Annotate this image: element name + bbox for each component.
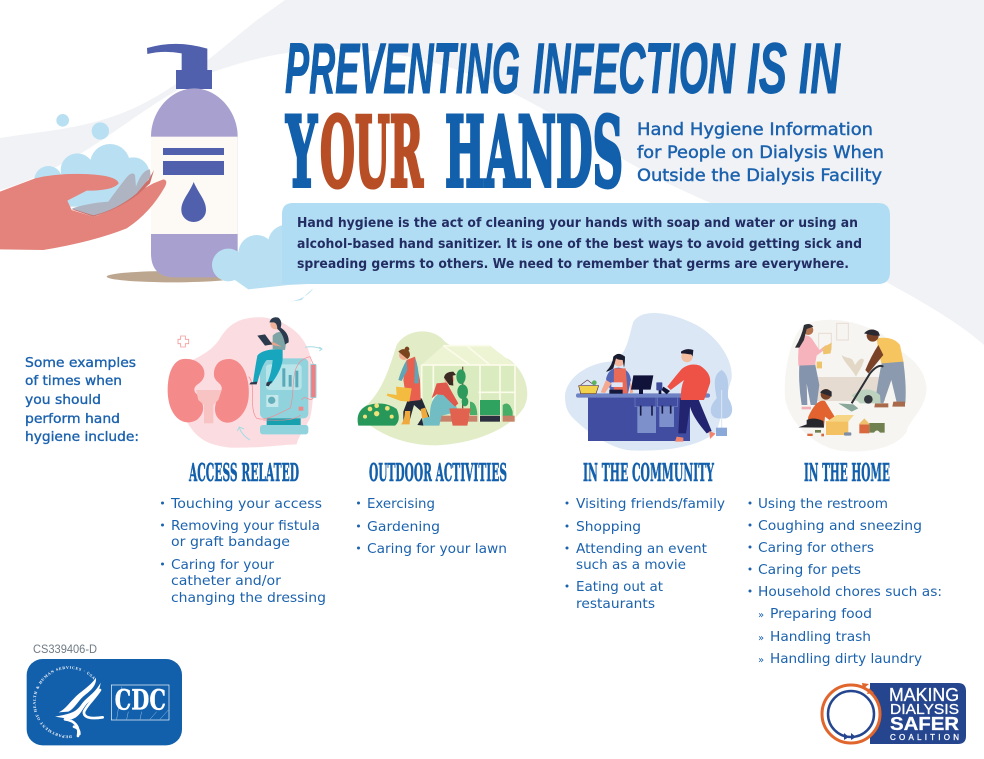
callout [282,203,890,284]
greenhouse [422,346,515,422]
foam on hand [34,114,149,207]
subtitle: Hand Hygiene Information [637,120,873,140]
illustration: in the home [785,320,927,452]
HHS eagle [55,678,103,736]
woman pouring [795,324,832,409]
title line one: IS [747,30,787,109]
CDC box: CDC [115,684,166,717]
list: in the home: » [758,655,764,666]
list: in the home: » [758,633,764,644]
document code: CS339406-D [33,642,97,656]
child with box [798,389,854,435]
list: in the home: Using the restroom [758,496,888,512]
side intro text: you should [25,393,101,408]
logo: Making Dialysis Safer Coalition: MAKING [889,685,959,705]
title line two: Y [286,96,318,209]
register [631,375,661,394]
list: in the community: Shopping [576,519,641,535]
list: in the home: Household chores such as: [758,584,942,600]
list: outdoor activities: Exercising [367,496,435,512]
room decor [813,323,885,401]
subtitle [637,120,884,186]
bottle body [151,88,238,277]
foam by callout [212,225,320,302]
callout: Hand hygiene is the act of cleaning your hands with soap and water or using an [297,216,858,231]
woman with tablet [249,317,289,386]
text: OUTDOOR ACTIVITIES [369,458,507,487]
title line one: INFECTION [533,30,736,109]
list: in the community: restaurants [576,596,655,612]
list: in the home [748,496,942,667]
list: outdoor activities: Gardening [367,519,440,535]
list: in the home: Coughing and sneezing [758,518,922,534]
title line one: PREVENTING [285,30,520,109]
arrows [237,347,322,440]
toy blocks [807,418,885,436]
illustration: outdoor activities [358,331,527,445]
background swoosh [0,0,984,345]
list: access related: Caring for your [171,557,274,573]
customer [662,349,716,442]
list: in the community: Visiting friends/family [576,496,725,512]
list: in the community [566,496,725,612]
subtitle: for People on Dialysis When [637,143,884,163]
text: HANDS [445,96,623,209]
list: access related: or graft bandage [171,534,290,550]
list: in the home: Caring for others [758,540,874,556]
bush [358,403,399,426]
plant [711,370,732,436]
list: in the community: Attending an event [576,541,707,557]
list: access related: Touching your access [170,496,322,512]
bottle label [151,137,238,234]
logo: HHS and CDC [26,659,182,746]
hand [0,174,166,250]
side intro text: perform hand [25,412,120,427]
list: access related: changing the dressing [171,590,326,606]
callout: alcohol-based hand sanitizer. It is one of the best ways to avoid getting sick and [297,237,862,252]
list: in the home: Preparing food [770,606,872,622]
list: in the home: Handling dirty laundry [770,651,922,667]
list: access related [161,496,326,606]
logo: Making Dialysis Safer Coalition [822,683,966,744]
text: IN THE COMMUNITY [583,458,714,487]
subtitle: Outside the Dialysis Facility [637,166,882,186]
title line one: IN [799,30,841,109]
cashier [601,354,633,394]
soap in palm [72,169,154,217]
HHS seal text: DEPARTMENT OF HEALTH & HUMAN SERVICES · USA [32,666,95,738]
list: access related: Removing your fistula [171,518,320,534]
dialysis machine [260,358,316,434]
gardener woman [387,347,429,424]
logo: Making Dialysis Safer Coalition: SAFER [890,713,959,734]
illustration: access related [168,317,322,448]
logo: Making Dialysis Safer Coalition: DIALYSIS [890,702,959,718]
side intro text: of times when [25,374,122,389]
list: outdoor activities: Caring for your lawn [367,541,507,557]
list: in the community: Eating out at [576,579,663,595]
side intro text [25,356,139,445]
list: in the home: Caring for pets [758,562,861,578]
callout: spreading germs to others. We need to remember that germs are everywhere. [297,257,849,272]
title line two: OUR [320,96,424,209]
side intro text: hygiene include: [25,430,139,445]
man with vacuum [838,330,906,412]
illustration: in the community [565,313,732,451]
list: in the home: Handling trash [770,629,871,645]
potted plant [449,367,471,426]
list: in the home: » [758,610,764,621]
basket [579,380,599,394]
kidneys [168,359,249,423]
list: in the community: such as a movie [576,557,686,573]
side intro text: Some examples [25,356,136,371]
list: access related: catheter and/or [171,573,281,589]
illustration: soap bottle and hand [0,44,320,302]
bottle shadow [107,271,240,282]
list: outdoor activities [357,496,507,557]
plus sign [178,336,189,347]
counter [576,393,710,441]
CDC box [111,684,169,720]
text: ACCESS RELATED [189,458,299,487]
gardener man [417,372,458,426]
bottle pump [147,44,212,89]
logo: Making Dialysis Safer Coalition: COALITION [890,733,959,742]
